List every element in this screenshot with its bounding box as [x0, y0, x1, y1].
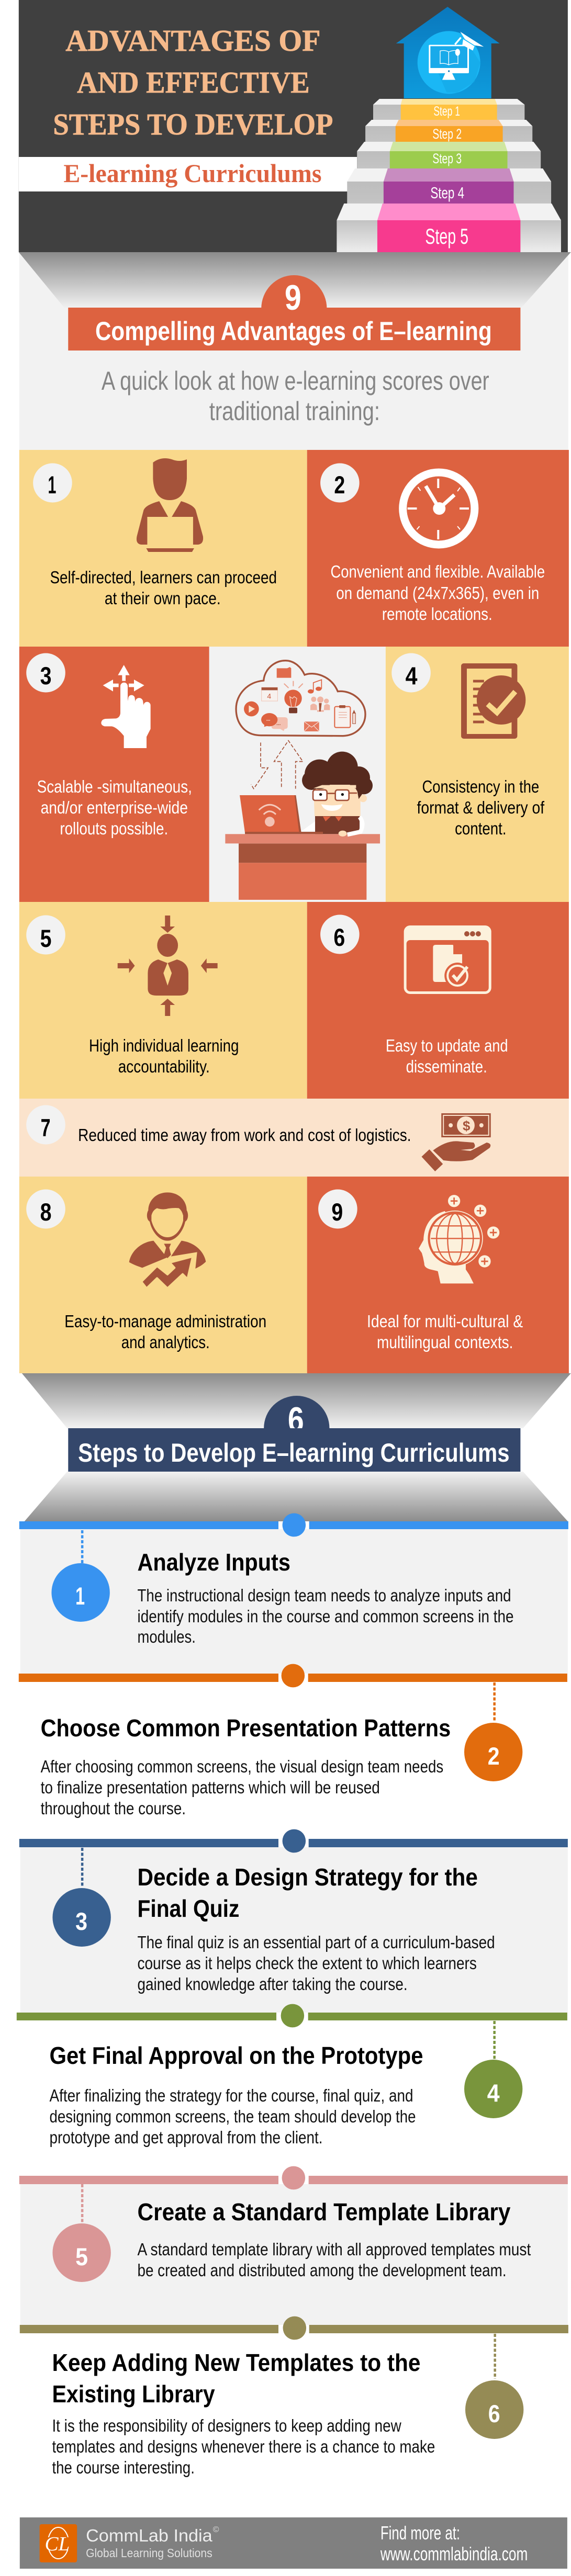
panel: advantage 1 — [19, 450, 307, 647]
panel: advantage 6: 6 — [333, 924, 345, 951]
heading: compelling advantages: Compelling Advantages of E–learning — [95, 317, 492, 346]
panel: step 4 — [17, 2004, 567, 2147]
panel: header — [19, 0, 568, 253]
panel: advantage 2 — [307, 450, 569, 647]
icon: manager with rising arrow — [129, 1192, 206, 1289]
panel: advantage 3: rollouts possible. — [60, 819, 168, 838]
panel: advantage 4: format & delivery of — [417, 798, 545, 817]
panel: step 1 — [19, 1513, 568, 1674]
panel: step 1: 1 — [75, 1583, 85, 1610]
panel: advantage 7 — [19, 1099, 569, 1177]
panel: advantage 4: content. — [455, 819, 507, 838]
subtitle band — [19, 157, 357, 191]
panel: advantage 7: Reduced time away from work and cost of logistics. — [78, 1125, 411, 1145]
panel: step 3: Decide a Design Strategy for the — [138, 1863, 478, 1891]
icon: staircase with steps: Step 4 — [430, 184, 464, 202]
icon: character with glasses — [301, 752, 373, 834]
panel: advantage 1: 1 — [48, 471, 56, 499]
panel: footer: © — [213, 2525, 219, 2534]
panel: advantage 8: 8 — [40, 1199, 51, 1226]
text: intro — [102, 366, 489, 426]
panel: advantage 6: disseminate. — [406, 1057, 487, 1076]
panel: advantage 4: 4 — [406, 662, 418, 690]
panel: footer: Find more at: — [380, 2523, 460, 2544]
panel: advantage 9: Ideal for multi-cultural & — [367, 1312, 523, 1331]
icon: desk and laptop — [225, 795, 380, 900]
panel: advantage 5: High individual learning — [89, 1036, 239, 1055]
title: ADVANTAGES OF — [65, 24, 321, 58]
icon: staircase with steps: Step 2 — [432, 126, 462, 142]
panel: step 4: After finalizing the strategy for the course, final quiz, and — [49, 2086, 413, 2105]
icon: CommLab logo — [40, 2524, 77, 2562]
icon: cloud with learning media: ... — [276, 721, 281, 727]
panel: step 1: Analyze Inputs — [138, 1549, 290, 1576]
title — [53, 24, 333, 141]
panel: illustration of learner and cloud — [209, 647, 386, 902]
panel: step 6: 6 — [488, 2400, 500, 2427]
panel: step 2 — [19, 1664, 567, 1818]
panel: advantage 4: Consistency in the — [422, 777, 539, 796]
panel: advantage 2: remote locations. — [382, 604, 492, 624]
icon: cloud with learning media: ... — [266, 716, 270, 721]
icon: cloud with learning media — [236, 661, 365, 736]
panel: advantage 1: Self-directed, learners can proceed — [50, 568, 277, 587]
panel: step 1: modules. — [138, 1627, 196, 1646]
panel: advantage 2: on demand (24x7x365), even in — [336, 583, 539, 603]
icon: hand holding money — [421, 1113, 491, 1171]
panel: advantage 5: accountability. — [118, 1057, 210, 1076]
icon: hand with arrows — [101, 665, 151, 748]
heading: compelling advantages — [68, 275, 520, 351]
panel: advantage 9 — [307, 1177, 569, 1373]
panel: step 4: designing common screens, the team should develop the — [49, 2107, 416, 2126]
heading: six steps: 6 — [288, 1400, 304, 1440]
icon: CommLab logo: CL — [45, 2533, 70, 2555]
panel: step 6: It is the responsibility of designers to keep adding new — [52, 2416, 401, 2435]
icon: head with globe — [419, 1195, 499, 1283]
icon: hand holding money: $ — [463, 1119, 471, 1134]
panel: advantage 8: and analytics. — [121, 1332, 210, 1352]
panel: footer — [20, 2517, 567, 2569]
panel: step 6: the course interesting. — [52, 2458, 195, 2477]
panel: step 1: The instructional design team needs to analyze inputs and — [138, 1586, 511, 1605]
panel: step 6: Keep Adding New Templates to the — [52, 2349, 420, 2376]
icon: browser window with document — [404, 925, 491, 994]
icon: house with e-learning monitor — [396, 7, 500, 98]
panel: advantage 3 — [19, 647, 209, 902]
icon: person with arrows — [118, 916, 218, 1016]
icon: staircase with steps: Step 1 — [433, 104, 460, 119]
panel: advantage 2: 2 — [334, 471, 345, 499]
panel: step 6: templates and designs whenever there is a chance to make — [52, 2437, 435, 2456]
panel: advantage 9: 9 — [331, 1199, 343, 1226]
panel: advantage 3: 3 — [40, 662, 51, 690]
text: intro: traditional training: — [209, 397, 380, 426]
panel: step 5: Create a Standard Template Library — [138, 2198, 511, 2225]
arrows: dashed up and down — [251, 741, 303, 789]
panel: step 1: identify modules in the course and common screens in the — [138, 1607, 513, 1626]
panel: step 3 — [19, 1829, 568, 2013]
panel: step 2: 2 — [488, 1743, 500, 1770]
title: AND EFFECTIVE — [77, 65, 310, 99]
icon: staircase with steps — [337, 99, 561, 253]
panel: advantage 9: multilingual contexts. — [377, 1332, 513, 1352]
heading: six steps — [22, 1373, 571, 1521]
panel: step 2: After choosing common screens, the visual design team needs — [41, 1757, 443, 1776]
panel: advantage 5: 5 — [40, 925, 51, 952]
panel: advantage 1: at their own pace. — [105, 589, 221, 608]
panel: footer: CommLab India — [86, 2526, 212, 2545]
icon: staircase with steps: Step 5 — [425, 224, 468, 248]
panel: step 4: prototype and get approval from the client. — [49, 2128, 323, 2147]
panel: advantage 7: 7 — [41, 1114, 50, 1142]
icon: person with laptop — [137, 458, 203, 552]
panel: step 3: gained knowledge after taking the course. — [138, 1974, 408, 1994]
panel: advantage 8: Easy-to-manage administration — [64, 1312, 266, 1331]
panel: step 5: be created and distributed among the development team. — [138, 2261, 507, 2280]
panel: advantage 3: Scalable -simultaneous, — [37, 777, 192, 796]
panel: step 2: Choose Common Presentation Patterns — [41, 1714, 451, 1742]
panel: footer: Global Learning Solutions — [86, 2546, 212, 2560]
panel: step 6: Existing Library — [52, 2380, 215, 2408]
panel: advantage 3: and/or enterprise-wide — [41, 798, 188, 817]
subtitle band: E-learning Curriculums — [63, 159, 322, 188]
panel: step 6 — [20, 2317, 568, 2477]
panel: advantage 5 — [19, 902, 307, 1099]
title: STEPS TO DEVELOP — [53, 107, 333, 141]
panel: step 5: 5 — [75, 2243, 88, 2270]
panel: step 3: course as it helps check the extent to which learners — [138, 1953, 477, 1973]
panel: step 3: 3 — [75, 1908, 87, 1935]
icon: staircase with steps: Step 3 — [432, 151, 462, 166]
panel: step 4: 4 — [487, 2080, 500, 2107]
panel: advantage 8 — [19, 1177, 307, 1373]
icon: clock — [403, 472, 475, 545]
panel: step 5 — [19, 2166, 568, 2325]
panel: step 2: throughout the course. — [41, 1799, 186, 1818]
icon: cloud with learning media: 4 — [267, 692, 271, 700]
icon: document with check — [461, 663, 525, 739]
panel: advantages background — [19, 252, 571, 450]
panel: step 3: Final Quiz — [138, 1895, 239, 1922]
panel: advantage 6 — [307, 902, 569, 1099]
panel: step 4: Get Final Approval on the Prototype — [49, 2042, 423, 2069]
panel: step 2: to finalize presentation patterns which will be reused — [41, 1778, 380, 1797]
panel: step 3: The final quiz is an essential part of a curriculum-based — [138, 1933, 495, 1952]
panel: advantage 4 — [386, 647, 569, 902]
panel: advantage 6: Easy to update and — [386, 1036, 508, 1055]
heading: compelling advantages: 9 — [285, 278, 301, 318]
